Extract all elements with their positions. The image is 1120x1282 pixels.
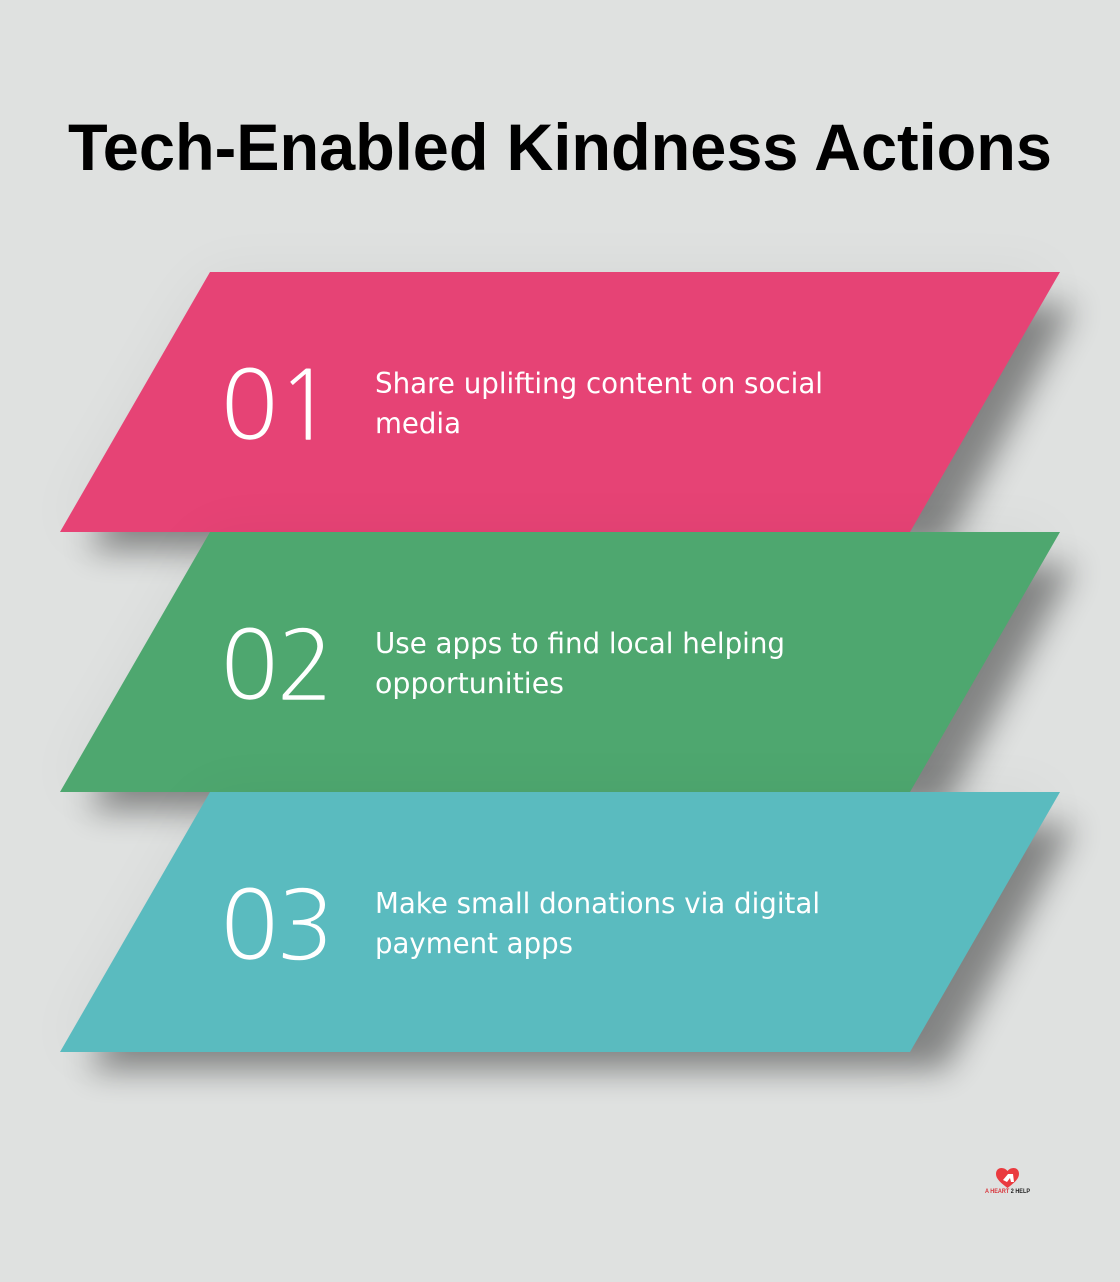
number 02: 02: [220, 617, 332, 714]
text: step 01: Share uplifting content on social: [375, 367, 823, 400]
panel: step 01: [60, 272, 1075, 550]
panel: step 02: [60, 532, 1075, 810]
text: step 03: Make small donations via digital: [375, 887, 820, 920]
text: step 03: [375, 887, 820, 960]
text: step 01: [375, 367, 823, 440]
text: step 01: media: [375, 407, 461, 440]
text: step 02: Use apps to find local helping: [375, 627, 785, 660]
icon: heart: [996, 1168, 1019, 1188]
panel: step 03: [60, 792, 1075, 1070]
logo: A Heart 2 Help: [985, 1168, 1030, 1195]
logo text: A HEART 2 HELP: [985, 1189, 1030, 1195]
title: Tech-Enabled Kindness Actions: [68, 110, 1052, 184]
text: step 02: [375, 627, 785, 700]
number 03: 03: [220, 877, 332, 974]
number 01: 01: [220, 357, 332, 454]
text: step 02: opportunities: [375, 667, 564, 700]
text: step 03: payment apps: [375, 927, 573, 960]
